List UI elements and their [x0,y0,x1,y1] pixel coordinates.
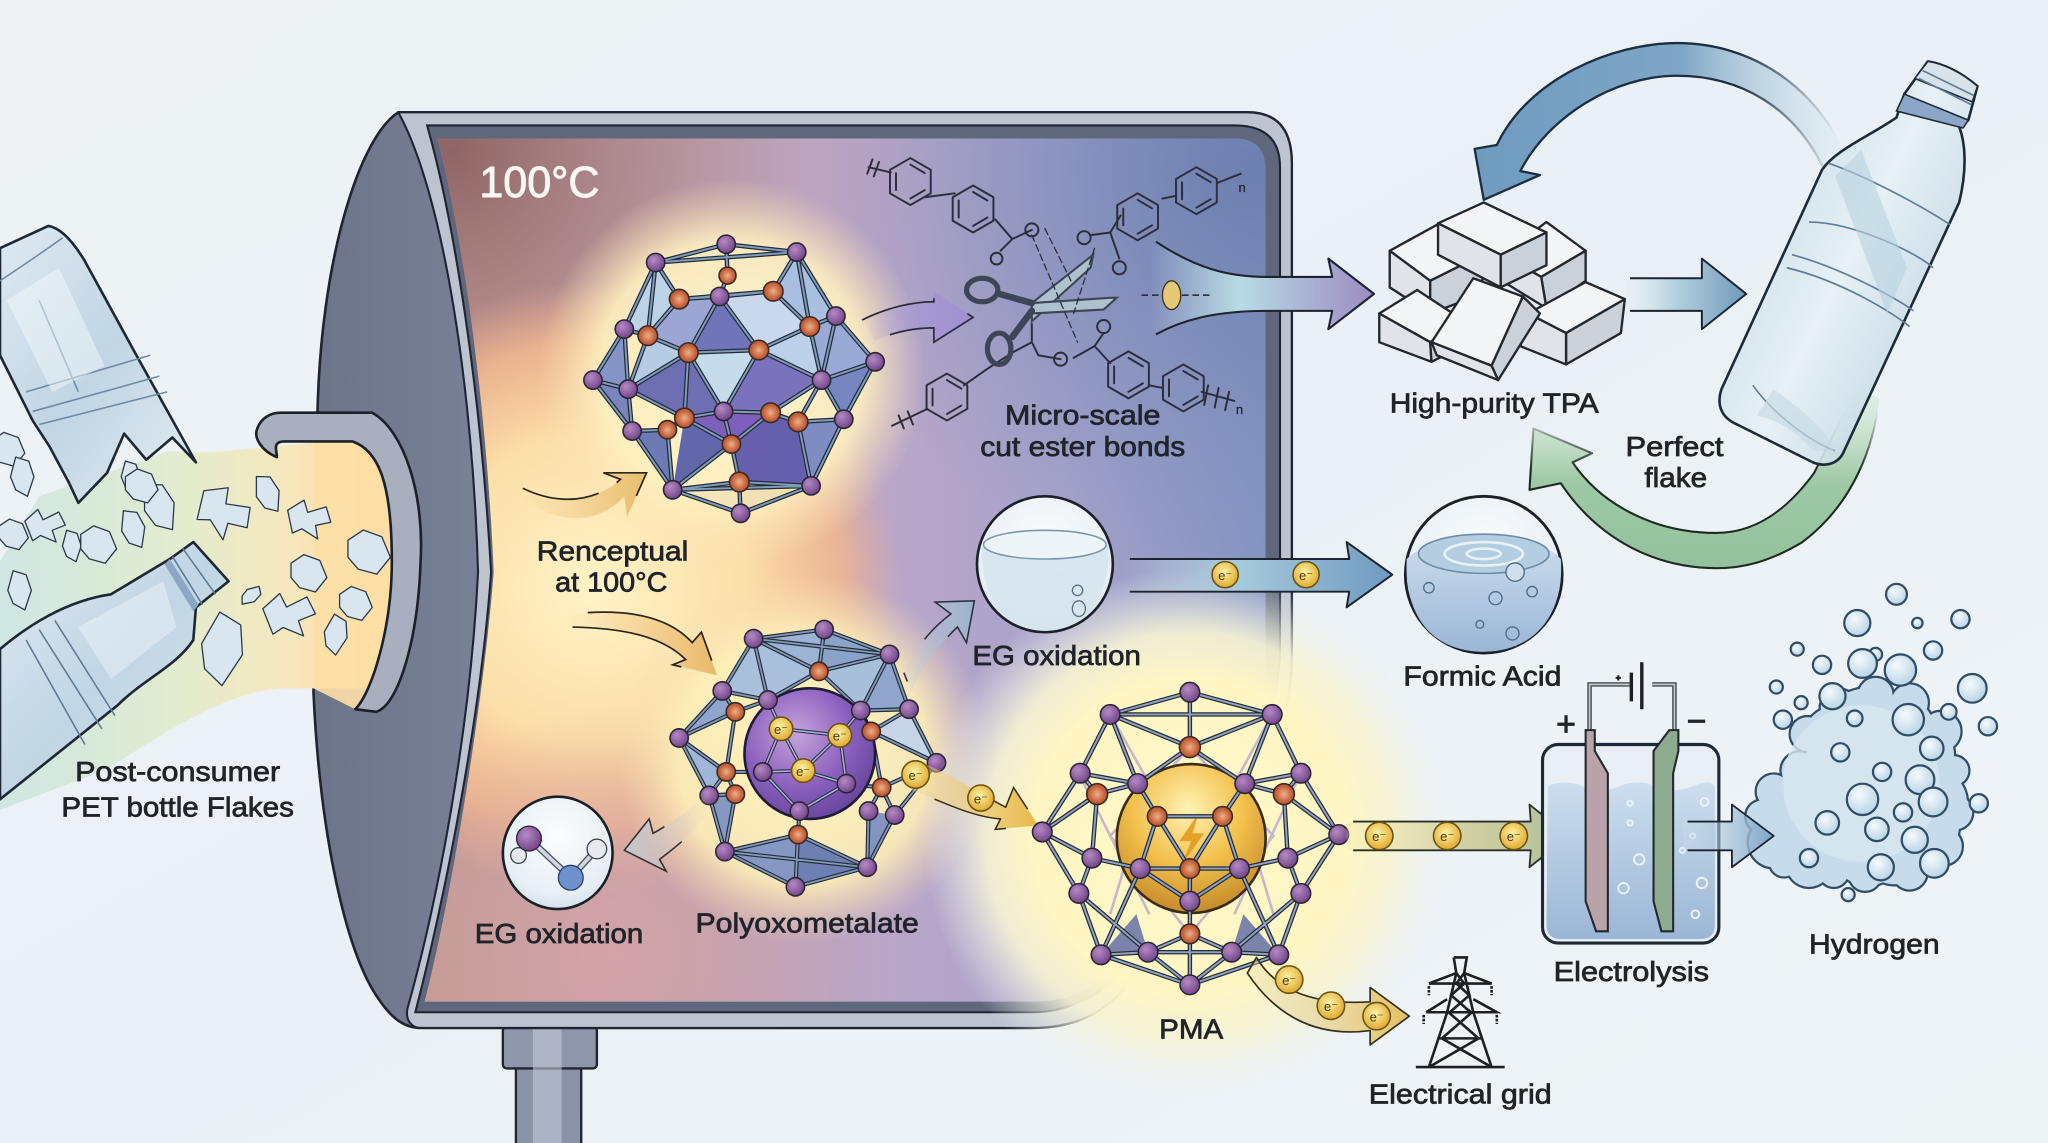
nodes [584,235,884,522]
recycle arrow: flake to TPA [1529,392,1880,568]
arrow: PMA to grid: e⁻ [1370,1009,1384,1024]
label: perfect flake: Perfect [1625,431,1724,462]
label: renceptual [537,535,688,598]
label: micro-scale: cut ester bonds [980,431,1185,462]
arrow: PMA to electrolysis [1347,805,1569,867]
electrons on gold arrow: e⁻ [974,791,988,806]
subscript n marks [1236,180,1246,417]
arrow: PMA to grid: e⁻ [1324,999,1338,1014]
vessel inner dark lip [415,125,1280,1012]
faces [593,252,875,513]
crumpled PET bottle [0,226,196,503]
pink electrode [1586,730,1608,931]
lower dark faces [1101,914,1148,955]
arrow: to formic acid [1123,542,1392,607]
internal electrons: e⁻ [796,764,810,779]
label: flakes [61,756,294,822]
label: perfect flake: flake [1644,462,1707,493]
icon: transmission tower [1416,957,1505,1067]
arrow: up to EG oxidation flask [904,601,974,692]
polyoxometalate cluster: middle [670,620,946,896]
label: EG oxidation upper: EG oxidation [972,640,1141,671]
circuit and battery [1590,684,1674,730]
internal electrons: e⁻ [774,722,788,737]
label: micro-scale: Micro-scale [1005,399,1160,430]
hydrogen cloud [1746,584,1997,901]
label: formic acid: Formic Acid [1403,661,1561,692]
green electrode [1654,730,1678,931]
cleaved fragment [1142,281,1211,310]
internal electrons: e⁻ [833,729,847,744]
arrow: into top cluster [516,473,647,518]
plus and minus: − [1687,703,1707,741]
electrons on gold arrow: e⁻ [909,768,923,783]
arrow: to formic acid: e⁻ [1218,568,1232,583]
faces [679,630,936,887]
arrow: TPA to bottle [1626,259,1746,329]
inlet stream [0,441,392,810]
label: perfect flake [1625,431,1724,493]
plus and minus [1556,703,1707,743]
arrow: cluster to scissors [862,291,973,342]
vessel outer shell [313,112,1292,1028]
temperature label: 100°C [479,159,600,207]
gold core sphere [1117,764,1266,913]
arrow: PMA to electrolysis: e⁻ [1507,829,1521,844]
label: high-purity TPA: High-purity TPA [1390,388,1599,419]
EG oxidation flask [977,496,1113,632]
label: EG oxidation lower: EG oxidation [475,918,643,949]
arrow: PMA to grid [1247,957,1409,1045]
arrow: electrolysis to hydrogen [1684,805,1774,867]
vessel rim [398,112,1292,1028]
high-purity TPA cubes [1379,202,1625,380]
label: renceptual: Renceptual [537,535,688,566]
electrons on gold arrow [902,761,994,811]
subscript n marks: n [1236,402,1243,417]
arrow: down to small molecule [624,794,712,871]
label: micro-scale [980,399,1185,462]
label: electrolysis: Electrolysis [1554,956,1709,987]
arrow: gold to PMA [904,758,1038,829]
PMA cluster [1032,682,1349,995]
arrow: to formic acid: e⁻ [1299,568,1313,583]
recycle arrow: bottle to TPA [1475,43,1855,200]
bubbles [1770,584,1997,901]
PET polymer chain: top [867,158,1241,274]
arrow: into polyoxometalate [562,612,717,675]
PET bottle with cap [0,542,229,799]
small molecule sphere [503,797,613,909]
inlet flange [256,413,421,712]
reaction window [418,131,1280,1019]
arrow: PMA to electrolysis: e⁻ [1440,829,1454,844]
reactor stand [503,1027,597,1143]
polyoxometalate cluster: top [584,235,884,522]
label: flakes: PET bottle Flakes [61,791,294,822]
label: PMA: PMA [1159,1013,1224,1044]
subscript n marks: n [1238,180,1246,195]
lightning bolt [1179,812,1204,866]
arrow: PMA to electrolysis: e⁻ [1372,829,1386,844]
arrow: to high-purity TPA [1149,235,1374,337]
scissors [967,229,1117,364]
arrow: PMA to grid: e⁻ [1282,973,1296,988]
nodes [670,620,946,896]
PMA glow [922,568,1458,1104]
label: polyoxometalate: Polyoxometalate [696,908,919,939]
clear PET bottle [1720,61,1977,465]
tank [1543,744,1719,943]
label: renceptual: at 100°C [555,567,667,598]
label: hydrogen: Hydrogen [1809,928,1940,959]
gas bubbles [1618,798,1708,918]
formic acid sphere [1405,496,1562,653]
nodes [1032,682,1349,995]
PET flakes [0,432,390,689]
label: electrical grid: Electrical grid [1369,1079,1552,1110]
PET polymer chain: bottom [892,320,1234,428]
label: flakes: Post-consumer [75,756,280,787]
plus and minus: + [1556,705,1576,743]
backside mesh [1079,714,1301,934]
electrolysis cell [1543,662,1719,943]
internal electrons [769,717,852,782]
reactor vessel [313,112,1292,1028]
core sphere [744,688,875,819]
